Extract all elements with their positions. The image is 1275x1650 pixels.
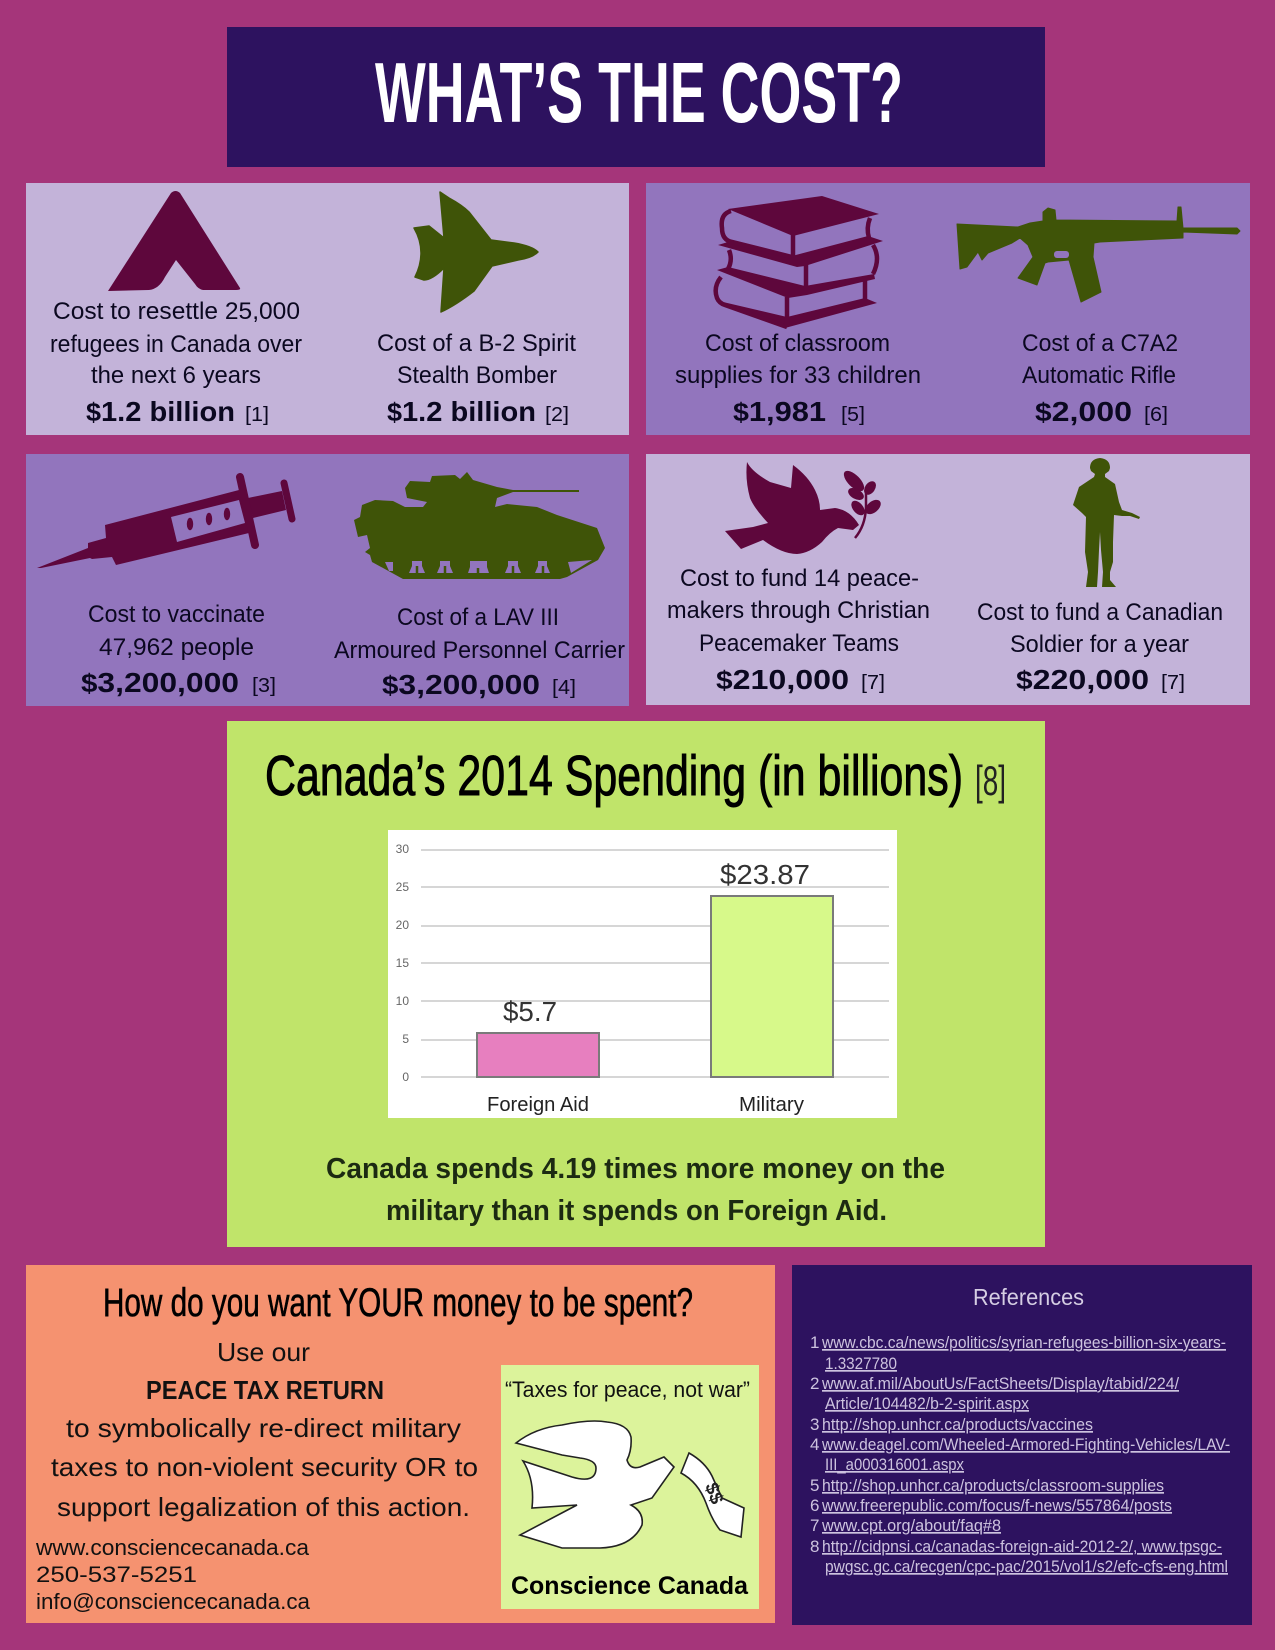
text: bomber cost: Stealth Bomber xyxy=(397,362,557,389)
panel: Canada's 2014 spending xyxy=(227,721,1045,1247)
text: peace tax return: Use our xyxy=(217,1337,310,1367)
bar value: military: $23.87 xyxy=(720,859,810,890)
references list: 2 xyxy=(810,1374,819,1393)
text: peace tax return: PEACE TAX RETURN xyxy=(146,1375,384,1405)
text: vaccine cost: 47,962 people xyxy=(99,634,254,661)
references list: 1 xyxy=(810,1333,819,1352)
bar: foreign aid xyxy=(477,1033,599,1077)
logo: white dove xyxy=(516,1421,674,1548)
text: soldier cost xyxy=(977,599,1223,695)
references list: www.freerepublic.com/focus/f-news/557864/posts xyxy=(821,1496,1172,1515)
text: soldier cost: Cost to fund a Canadian xyxy=(977,599,1223,626)
panel: Conscience Canada logo xyxy=(501,1365,759,1609)
references list: 1.3327780 xyxy=(825,1354,897,1373)
panel: refugees vs bomber xyxy=(26,183,629,435)
icon: armoured vehicle xyxy=(354,472,605,579)
text: spending comparison xyxy=(326,1153,945,1227)
chart y axis labels: 15 xyxy=(396,956,409,970)
text: refugee cost: refugees in Canada over xyxy=(50,331,302,358)
title banner xyxy=(227,27,1045,167)
text: bomber cost: [2] xyxy=(545,404,569,426)
text: contact details xyxy=(35,1535,311,1614)
references heading: References xyxy=(973,1284,1084,1310)
references list: www.cpt.org/about/faq#8 xyxy=(821,1516,1001,1535)
chart y axis labels: 5 xyxy=(402,1032,409,1046)
references list: 7 xyxy=(810,1516,819,1535)
chart y axis labels: 10 xyxy=(396,994,409,1008)
text: contact details: info@consciencecanada.ca xyxy=(36,1589,311,1614)
references list: III_a000316001.aspx xyxy=(825,1455,964,1474)
panel: vaccines vs armoured carrier xyxy=(26,454,629,706)
icon: assault rifle xyxy=(957,207,1240,302)
references list: 5 xyxy=(810,1476,819,1495)
text: refugee cost: [1] xyxy=(245,404,269,426)
text: classroom cost: Cost of classroom xyxy=(705,330,890,357)
text: peacemaker cost: Peacemaker Teams xyxy=(699,630,899,657)
icon: soldier silhouette xyxy=(1073,458,1140,587)
bar value: foreign aid: $5.7 xyxy=(503,996,557,1027)
text: soldier cost: Soldier for a year xyxy=(1010,631,1189,658)
icon: syringe xyxy=(37,477,292,568)
text: soldier cost: [7] xyxy=(1161,672,1185,694)
references list: 6 xyxy=(810,1496,819,1515)
text: peace tax return: support legalization of this action. xyxy=(57,1492,470,1522)
references list xyxy=(810,1333,1230,1576)
panel: classroom supplies vs rifle xyxy=(646,183,1250,435)
logo: dollar bill xyxy=(681,1453,744,1537)
text: spending comparison: military than it spends on Foreign Aid. xyxy=(386,1195,887,1227)
text: armoured carrier cost: [4] xyxy=(552,677,576,699)
text: peace tax return: to symbolically re-direct military xyxy=(66,1413,461,1443)
text: peacemaker cost xyxy=(667,565,930,695)
panel: call to action xyxy=(26,1265,775,1623)
references list: http://shop.unhcr.ca/products/classroom-supplies xyxy=(822,1476,1164,1495)
references list: http://shop.unhcr.ca/products/vaccines xyxy=(822,1415,1093,1434)
panel: peacemakers vs soldier xyxy=(646,454,1250,705)
references list: pwgsc.gc.ca/recgen/cpc-pac/2015/vol1/s2/efc-cfs-eng.html xyxy=(825,1557,1228,1576)
heading: spending: Canada’s 2014 Spending (in billions) xyxy=(265,744,963,808)
category label: foreign aid: Foreign Aid xyxy=(487,1094,589,1116)
text: bomber cost xyxy=(377,330,576,427)
text: rifle cost: [6] xyxy=(1144,404,1168,426)
text: rifle cost: Cost of a C7A2 xyxy=(1022,330,1178,357)
references list: www.cbc.ca/news/politics/syrian-refugees-billion-six-years- xyxy=(821,1333,1226,1352)
chart y axis labels: 20 xyxy=(396,918,409,932)
text: armoured carrier cost xyxy=(334,604,625,700)
category label: military: Military xyxy=(739,1094,804,1116)
text: classroom cost: [5] xyxy=(841,404,865,426)
text: armoured carrier cost: $3,200,000 xyxy=(382,669,540,700)
chart y axis labels xyxy=(396,842,409,1084)
references list: Article/104482/b-2-spirit.aspx xyxy=(825,1394,1029,1413)
text: peacemaker cost: $210,000 xyxy=(716,664,849,695)
text: peacemaker cost: Cost to fund 14 peace- xyxy=(680,565,919,592)
panel: references xyxy=(792,1265,1252,1625)
text: peacemaker cost: [7] xyxy=(861,672,885,694)
text: vaccine cost: [3] xyxy=(252,675,276,697)
text: refugee cost: the next 6 years xyxy=(91,362,261,389)
text: soldier cost: $220,000 xyxy=(1016,664,1149,695)
text: armoured carrier cost: Armoured Personnel Carrier xyxy=(334,637,625,664)
text: vaccine cost: Cost to vaccinate xyxy=(88,601,265,628)
references list: www.deagel.com/Wheeled-Armored-Fighting-Vehicles/LAV- xyxy=(821,1435,1230,1454)
text: refugee cost: Cost to resettle 25,000 xyxy=(53,298,300,325)
logo: dollar bill: $$ xyxy=(700,1480,727,1507)
text: spending comparison: Canada spends 4.19 times more money on the xyxy=(326,1153,945,1185)
text: vaccine cost xyxy=(81,601,276,698)
icon: dove with olive branch xyxy=(725,462,883,554)
text: classroom cost xyxy=(675,330,921,427)
bar: military xyxy=(711,896,833,1077)
icon: tent xyxy=(108,191,240,291)
icon: stack of books xyxy=(716,196,883,328)
text: rifle cost xyxy=(1022,330,1178,427)
references list: www.af.mil/AboutUs/FactSheets/Display/tabid/224/ xyxy=(821,1374,1179,1393)
text: refugee cost: $1.2 billion xyxy=(86,396,235,427)
icon: fighter jet xyxy=(414,192,538,312)
references list: 3 xyxy=(810,1415,819,1434)
text: vaccine cost: $3,200,000 xyxy=(81,667,239,698)
chart y axis labels: 0 xyxy=(402,1070,409,1084)
heading: spending: [8] xyxy=(975,757,1006,804)
text: peace tax return xyxy=(51,1337,478,1522)
title banner: WHAT’S THE COST? xyxy=(375,46,903,141)
chart y axis labels: 25 xyxy=(396,880,409,894)
logo name: Conscience Canada xyxy=(511,1572,749,1600)
text: contact details: www.consciencecanada.ca xyxy=(35,1535,310,1560)
logo quote: “Taxes for peace, not war” xyxy=(505,1377,750,1402)
references list: 4 xyxy=(810,1435,819,1454)
text: bomber cost: Cost of a B-2 Spirit xyxy=(377,330,576,357)
text: rifle cost: $2,000 xyxy=(1035,396,1132,427)
heading: your money: How do you want YOUR money to be spent? xyxy=(103,1281,693,1325)
chart y axis labels: 30 xyxy=(396,842,409,856)
text: peace tax return: taxes to non-violent security OR to xyxy=(51,1452,478,1482)
text: contact details: 250-537-5251 xyxy=(36,1562,197,1587)
text: refugee cost xyxy=(50,298,302,427)
text: peacemaker cost: makers through Christian xyxy=(667,597,930,624)
references list: http://cidpnsi.ca/canadas-foreign-aid-2012-2/, www.tpsgc- xyxy=(822,1537,1222,1556)
bar chart xyxy=(388,830,897,1118)
text: classroom cost: supplies for 33 children xyxy=(675,362,921,389)
text: rifle cost: Automatic Rifle xyxy=(1022,362,1176,389)
text: bomber cost: $1.2 billion xyxy=(387,396,536,427)
references list: 8 xyxy=(810,1537,819,1556)
text: armoured carrier cost: Cost of a LAV III xyxy=(397,604,559,631)
text: classroom cost: $1,981 xyxy=(733,396,826,427)
